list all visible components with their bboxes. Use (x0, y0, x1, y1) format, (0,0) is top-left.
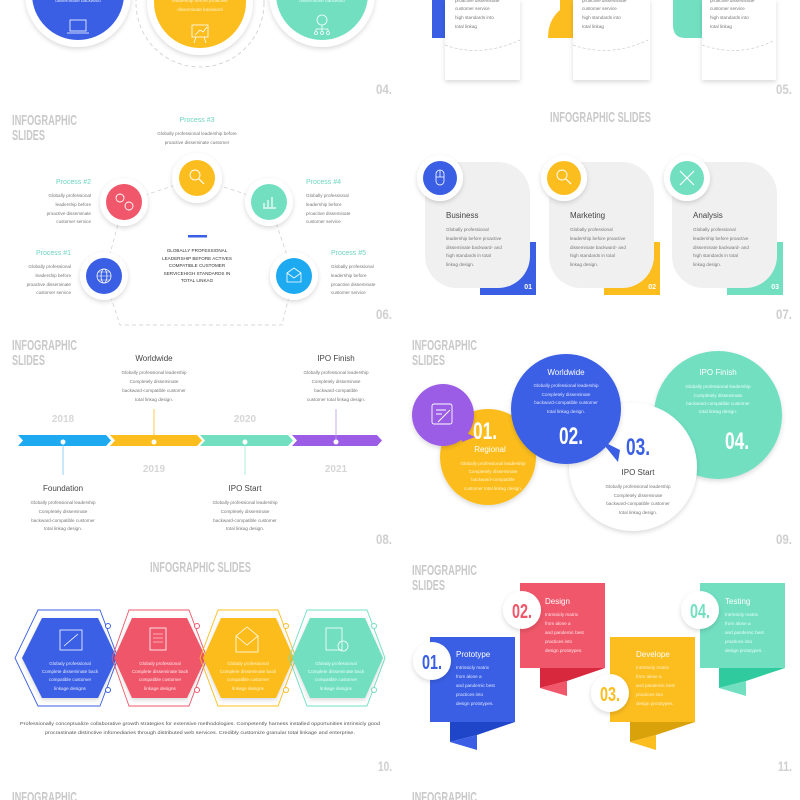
ribbon: 03 develope: design prototypes. (636, 701, 674, 706)
panel: slide 06 process diagram: proactive disseminate (47, 211, 91, 216)
chart: slide 08 timeline: customer total linkag design. (307, 397, 365, 402)
text block: center summary: GLOBALLY PROFESSIONAL (167, 248, 228, 253)
panel: slide 06 process diagram: leadership before (56, 202, 91, 207)
slide number 10: 10. (378, 758, 392, 774)
chart: slide 08 timeline: backward-compatible customer (213, 518, 277, 523)
hexagon: blue: Complete disseminate back (42, 669, 99, 674)
hexagon: yellow: linkage designs (232, 686, 265, 691)
icon: chart board (192, 25, 208, 43)
hexagon: red (112, 610, 207, 706)
panel: slide 06 process diagram: customer service (306, 219, 341, 224)
slide number 04: 04. (376, 81, 392, 97)
heading: slide 11 title (412, 562, 477, 594)
chart: slide 08 timeline: 2019 (143, 464, 166, 475)
chart: slide 08 timeline: backward-compatible (314, 388, 358, 393)
chart: slide 08 timeline: Completely disseminate (39, 509, 88, 514)
ribbon: 02 design: Intrinsicly matrix (545, 612, 579, 617)
bubble: 04 teal: 04. (725, 428, 749, 455)
bubble: 01 yellow: 01. (473, 418, 497, 445)
chart: slide 08 timeline: Globally professional leadership (30, 500, 96, 505)
heading: slide 07 title: INFOGRAPHIC SLIDES (550, 109, 651, 126)
text block: paragraph (20, 721, 381, 735)
ribbon: 04 testing: design prototypes. (725, 648, 763, 653)
hexagon: yellow: Complete disseminate back (220, 669, 277, 674)
hexagon: blue: compatible customer (49, 677, 92, 682)
chart: slide 08 timeline: Completely disseminate (130, 379, 179, 384)
bubble: 01 yellow: Globally professional leadership (460, 461, 526, 466)
chart: slide 08 timeline: total linkag design. (135, 397, 173, 402)
ribbon: 04 testing: practices into (725, 639, 753, 644)
panel: slide 06 process diagram: proactive disseminate (27, 282, 71, 287)
heading: slide 09 title: INFOGRAPHIC (412, 337, 477, 354)
panel: slide 05 partial cards: total linkag (455, 24, 477, 29)
panel: slide 09 bubbles (412, 351, 782, 531)
panel: slide 06 process diagram: Process #4 (306, 179, 341, 186)
bubble: 03 white (569, 403, 697, 531)
card: analysis: disseminate backward- and (693, 245, 749, 250)
icon: team (314, 15, 330, 34)
chart: slide 08 timeline: Globally professional leadership (121, 370, 187, 375)
bubble: 04 teal: total linkag design. (699, 409, 737, 414)
slide number 05: 05. (776, 81, 792, 97)
card: marketing: disseminate backward- and (570, 245, 626, 250)
text block: center summary: LEADERSHIP BEFORE ACTIVES (162, 256, 232, 261)
panel: slide 05 partial cards: high standards into (582, 15, 621, 20)
card: marketing: high standards in total (570, 253, 615, 258)
hexagon: teal (289, 610, 385, 706)
bubble: 04 teal: Globally professional leadership (685, 384, 751, 389)
panel: slide 06 process diagram: customer service (331, 290, 366, 295)
ribbon: 03 develope: and pandemic best (636, 683, 676, 688)
panel: slide 06 process diagram: leadership before (306, 202, 342, 207)
chart: slide 08 timeline: 2020 (234, 414, 257, 425)
chart: slide 08 timeline: backward-compatible customer (31, 518, 95, 523)
panel: slide 05 partial cards: customer service (710, 6, 745, 11)
panel: slide 07 cards (417, 155, 783, 295)
chart: slide 08 timeline: IPO Finish (317, 354, 355, 363)
heading: slide 06 title: INFOGRAPHIC (12, 112, 77, 129)
chart: slide 08 timeline: 2021 (325, 464, 348, 475)
card: marketing: leadership before proactive (570, 236, 626, 241)
card: analysis: high standards in total (693, 253, 738, 258)
panel: slide 06 process diagram (27, 117, 376, 325)
heading: slide 06 title (12, 112, 77, 144)
chart: slide 08 timeline (18, 354, 382, 531)
heading: slide 11 title: SLIDES (412, 577, 445, 594)
ribbon: 02 design: Design (545, 597, 570, 606)
bubble: 03 white: IPO Start (622, 468, 655, 477)
ribbon: 04 testing: 04. (690, 601, 710, 623)
ribbon: 02 design: 02. (512, 601, 532, 623)
bubble: 03 white: backward-compatible customer (606, 501, 670, 506)
card: business: disseminate backward- and (446, 245, 502, 250)
ribbon: 03 develope: Intrinsicly matrix (636, 665, 670, 670)
heading: slide 08 title (12, 337, 77, 369)
bubble: 04 teal: Completely disseminate (694, 393, 743, 398)
hexagon: yellow: compatible customer (227, 677, 270, 682)
ribbon: 01 prototype: from alone a (456, 674, 482, 679)
ribbon: 03 develope: 03. (600, 684, 620, 706)
card: business: leadership before proactive (446, 236, 502, 241)
hexagon: teal: compatible customer (315, 677, 358, 682)
panel: slide 06 process diagram: Process #2 (56, 179, 91, 186)
icon: purple bubble with notepad (412, 384, 475, 446)
bubble: 01 yellow: backward-compatible (471, 477, 515, 482)
slide number 09: 09. (776, 531, 792, 547)
heading: slide 11 title: INFOGRAPHIC (412, 562, 477, 579)
panel: slide 06 process diagram: Process #3 (179, 117, 215, 124)
ribbon: 01 prototype: Prototype (456, 650, 491, 659)
chart: slide 08 timeline: Globally professional leadership (303, 370, 369, 375)
text block: center summary (162, 235, 232, 283)
card: marketing: 02 (648, 284, 656, 291)
ribbon: 02 design: from alone a (545, 621, 571, 626)
panel: slide 06 process diagram: Globally professional (28, 264, 71, 269)
panel: slide 05 partial cards (432, 0, 776, 80)
ribbon: 02 design: and pandemic best (545, 630, 585, 635)
panel: slide 04 partial circles (25, 0, 375, 67)
hexagon: red: compatible customer (139, 677, 182, 682)
chart: slide 08 timeline: backward-compatible customer (122, 388, 186, 393)
chart: slide 08 timeline: Globally professional leadership (212, 500, 278, 505)
bubble: 02 blue: total linkag design. (547, 409, 585, 414)
slide number 06: 06. (376, 306, 392, 322)
bubble: 03 white: Globally professional leadership (605, 484, 671, 489)
panel: slide 11 ribbons (413, 583, 785, 750)
panel: slide 05 partial cards: customer service (455, 6, 490, 11)
card: analysis (664, 155, 783, 295)
ribbon: 01 prototype: Intrinsicly matrix (456, 665, 490, 670)
panel: slide 06 process diagram: Process #1 (36, 250, 71, 257)
hexagon: teal: Globaly professional (315, 661, 357, 666)
panel: slide 05 partial cards: total linkag (582, 24, 604, 29)
panel: slide 06 process diagram: proactive disseminate (306, 211, 351, 216)
card: business: high standards in total (446, 253, 491, 258)
hexagon: blue: linkage designs (54, 686, 87, 691)
card: analysis: linkag design. (693, 262, 721, 267)
bubble: 04 teal (654, 351, 782, 479)
ribbon: 04 testing: Intrinsicly matrix (725, 612, 759, 617)
ribbon: 04 testing (681, 583, 785, 696)
text block: center summary: COMPATIBLE CUSTOMER (169, 263, 226, 268)
hexagon: blue: Globaly professional (49, 661, 91, 666)
hexagon: red: Globaly professional (139, 661, 181, 666)
bubble: 01 yellow: Regional (474, 445, 506, 454)
icon: laptop (67, 20, 89, 33)
panel: slide 04 partial circles: disseminate backward (177, 7, 223, 12)
chart: slide 08 timeline: Foundation (43, 484, 83, 493)
ribbon: 03 develope: Develope (636, 650, 670, 659)
card: marketing: Globally professional (570, 227, 613, 232)
slide number 08: 08. (376, 531, 392, 547)
ribbon: 03 develope: from alone a (636, 674, 662, 679)
card: business: 01 (524, 284, 532, 291)
hexagon: red: Complete disseminate back (132, 669, 189, 674)
bubble: 02 blue: Worldwide (547, 368, 585, 377)
panel: slide 06 process diagram: Process #5 (331, 250, 366, 257)
card: analysis: 03 (771, 284, 779, 291)
panel: slide 05 partial cards: total linkag (710, 24, 732, 29)
hexagon: blue (15, 610, 118, 706)
icon: process 1 globe (80, 252, 128, 300)
card: business: Globally professional (446, 227, 489, 232)
ribbon: 02 design (503, 583, 605, 696)
card: business (417, 155, 536, 295)
ribbon: 01 prototype: and pandemic best (456, 683, 496, 688)
panel: slide 05 partial cards: high standards into (455, 15, 494, 20)
chart: slide 08 timeline: Worldwide (135, 354, 173, 363)
chart: slide 08 timeline: Completely disseminate (221, 509, 270, 514)
heading: slide 10 title: INFOGRAPHIC SLIDES (150, 559, 251, 576)
ribbon: 04 testing: and pandemic best (725, 630, 765, 635)
panel: slide 10 hexagons (15, 610, 385, 735)
hexagon: teal: linkage designs (320, 686, 353, 691)
ribbon: 01 prototype: 01. (422, 652, 442, 674)
icon: process 2 gears (100, 178, 148, 226)
heading: slide 06 title: SLIDES (12, 127, 45, 144)
text block: center summary: SERVICEHIGH STANDARDS IN (164, 271, 230, 276)
bubble: 02 blue: 02. (559, 423, 583, 450)
panel: slide 06 process diagram: Globally professional leadership before (157, 131, 237, 136)
panel: slide 06 process diagram: leadership before (36, 273, 71, 278)
heading: slide 09 title: SLIDES (412, 352, 445, 369)
bubble: 01 yellow (440, 409, 545, 505)
text block: paragraph: Professionally conceptualize collaborative growth strategies for extensive methodologies. Competently harness installed opportunities intrinsicly good (20, 721, 381, 726)
ribbon: 02 design: practices into (545, 639, 573, 644)
bubble: 03 white: total linkag design. (619, 510, 657, 515)
ribbon: 01 prototype: design prototypes. (456, 701, 494, 706)
hexagon: teal: Complete disseminate back (308, 669, 365, 674)
panel: slide 06 process diagram: Globally professional (306, 193, 349, 198)
bubble: 03 white: 03. (626, 434, 650, 461)
ribbon: 04 testing: Testing (725, 597, 750, 606)
bubble: 04 teal: IPO Finish (699, 368, 737, 377)
heading: slide 08 title: SLIDES (12, 352, 45, 369)
ribbon: 02 design: design prototypes. (545, 648, 583, 653)
hexagon: red: linkage designs (144, 686, 177, 691)
chart: slide 08 timeline: 2018 (52, 414, 75, 425)
card: analysis: leadership before proactive (693, 236, 749, 241)
panel: slide 06 process diagram: customer service (36, 290, 71, 295)
bubble: 02 blue (511, 354, 621, 464)
bubble: 01 yellow: Completely disseminate (469, 469, 518, 474)
ribbon: 03 develope: practices into (636, 692, 664, 697)
card: marketing: linkag design. (570, 262, 598, 267)
card: business: linkag design. (446, 262, 474, 267)
panel: slide 05 partial cards: customer service (582, 6, 617, 11)
card: marketing: Marketing (570, 211, 605, 220)
slide number 11: 11. (778, 758, 792, 774)
bubble: 02 blue: Globally professional leadership (533, 383, 599, 388)
panel: slide 06 process diagram: Globally professional (331, 264, 374, 269)
card: analysis: Analysis (693, 211, 723, 220)
card: marketing (541, 155, 660, 295)
panel: slide 06 process diagram: leadership before (331, 273, 367, 278)
ribbon: 04 testing: from alone a (725, 621, 751, 626)
heading: slide 08 title: INFOGRAPHIC (12, 337, 77, 354)
panel: slide 05 partial cards: high standards into (710, 15, 749, 20)
text block: center summary: TOTAL LINKAG (181, 278, 214, 283)
bubble: 01 yellow: customer total linkag design. (464, 486, 522, 491)
heading: slide 09 title (412, 337, 477, 369)
chart: slide 08 timeline: IPO Start (229, 484, 262, 493)
bubble: 04 teal: backward-compatible customer (686, 401, 750, 406)
panel: slide 06 process diagram: Globally professional (48, 193, 91, 198)
bubble: 03 white: Completely disseminate (614, 493, 663, 498)
chart: slide 08 timeline: total linkag design. (44, 526, 82, 531)
icon: process 4 chart (245, 178, 293, 226)
panel: slide 06 process diagram: proactive disseminate customer (165, 140, 230, 145)
slide number 07: 07. (776, 306, 792, 322)
icon: process 5 mail (270, 252, 318, 300)
chart: slide 08 timeline: total linkag design. (226, 526, 264, 531)
hexagon: yellow: Globaly professional (227, 661, 269, 666)
text block: paragraph: procrastinate distinctive infomediaries through distributed web services. Credibly customize granular total linkage and enterprise. (45, 730, 355, 735)
heading: bottom partial titles (12, 789, 477, 800)
hexagon: yellow (200, 610, 296, 706)
card: business: Business (446, 211, 478, 220)
ribbon: 01 prototype: practices into (456, 692, 484, 697)
panel: slide 06 process diagram: proactive disseminate (331, 282, 376, 287)
chart: slide 08 timeline: Completely disseminate (312, 379, 361, 384)
ribbon: 03 develope (591, 637, 695, 750)
panel: slide 06 process diagram: customer service (56, 219, 91, 224)
ribbon: 01 prototype (413, 637, 515, 750)
bubble: 02 blue: Completely disseminate (542, 392, 591, 397)
bubble: 02 blue: backward-compatible customer (534, 400, 598, 405)
icon: process 3 search (172, 153, 222, 203)
card: analysis: Globally professional (693, 227, 736, 232)
